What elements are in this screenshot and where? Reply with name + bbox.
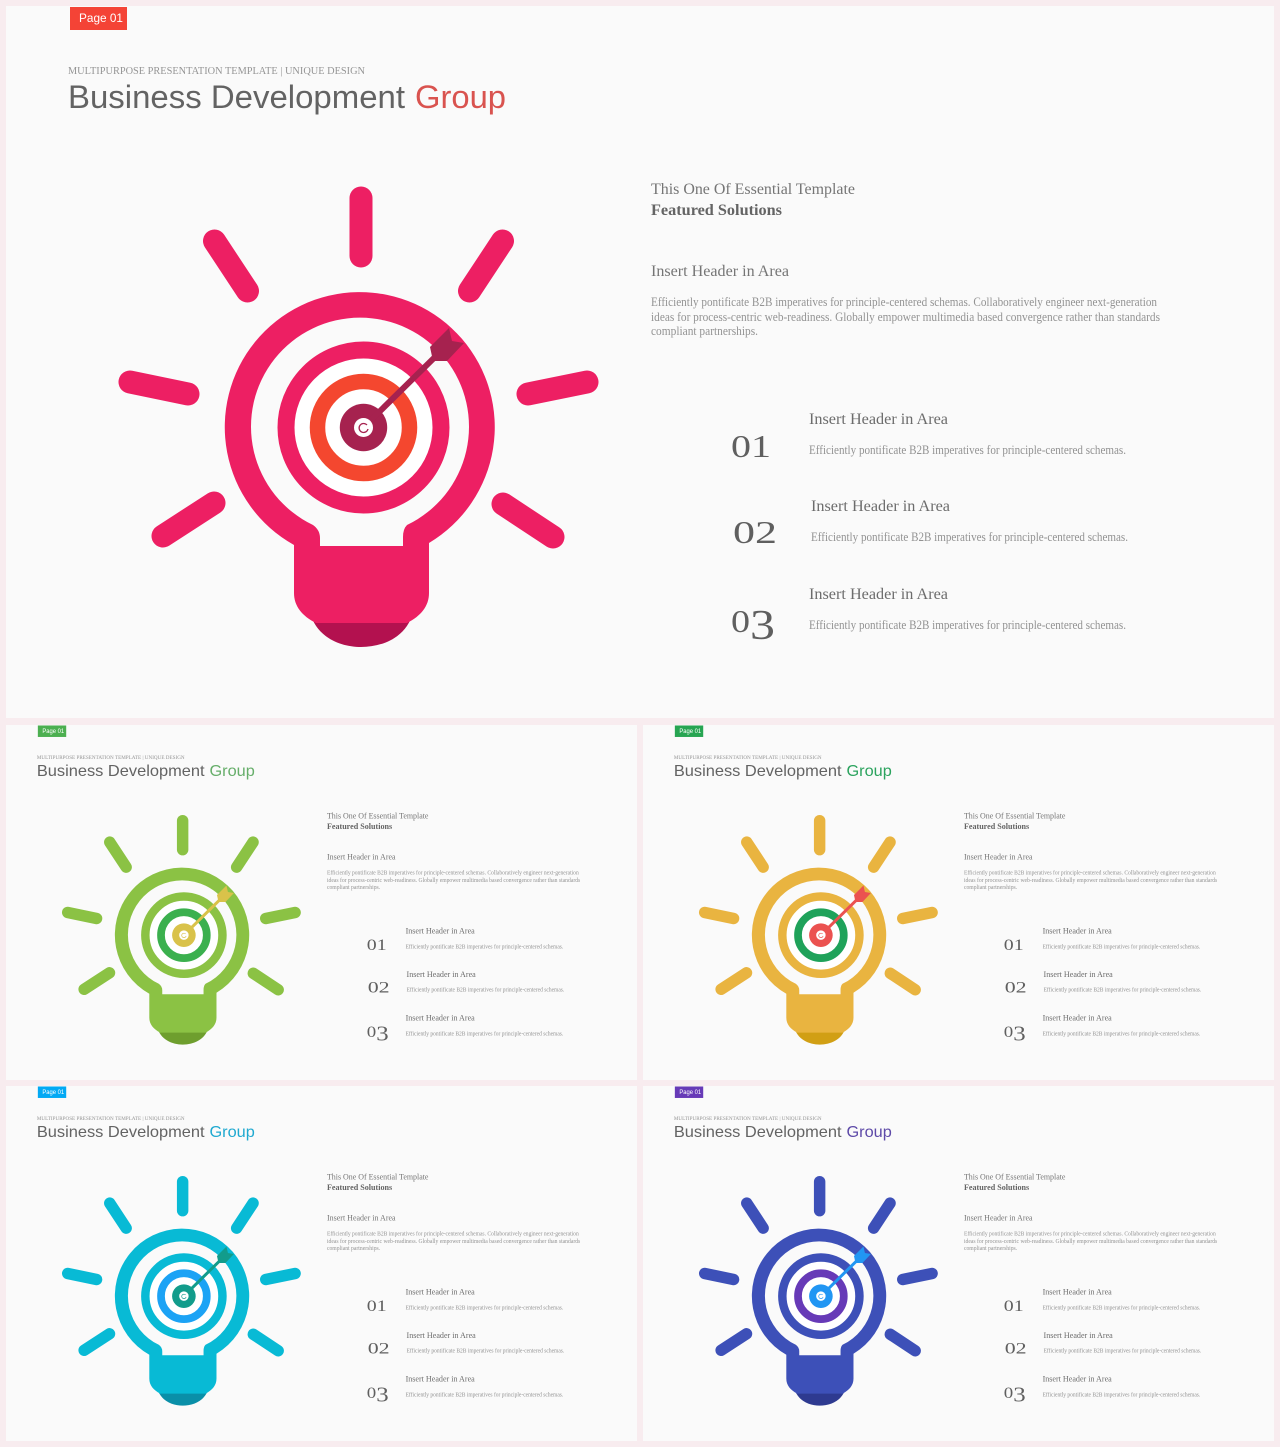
- text block: intro: This One Of Essential Template: [651, 181, 855, 198]
- text block: intro: Efficiently pontificate B2B imperatives for principle-centered schemas. Collaboratively engineer next-generation: [964, 870, 1217, 877]
- title: Business Development: [674, 1124, 842, 1141]
- page tag: [70, 7, 127, 30]
- list item 03: [367, 1375, 564, 1407]
- subtitle: MULTIPURPOSE PRESENTATION TEMPLATE | UNIQUE DESIGN: [68, 65, 365, 77]
- list item 03: Insert Header in Area: [809, 586, 948, 603]
- bulb body: [115, 1229, 249, 1394]
- text block: intro: Insert Header in Area: [964, 1214, 1033, 1223]
- dart: [372, 328, 464, 419]
- title: Group: [210, 1124, 255, 1141]
- icon: light bulb with target: [705, 821, 932, 1045]
- target rings: [782, 897, 859, 974]
- list item 03: Efficiently pontificate B2B imperatives for principle-centered schemas.: [1043, 1392, 1201, 1399]
- text block: intro: ideas for process-centric web-readiness. Globally empower multimedia based convergence rather than standards: [964, 1238, 1218, 1245]
- list item 02: Insert Header in Area: [407, 1331, 476, 1340]
- bulb cap: [157, 1027, 209, 1045]
- text block: intro: This One Of Essential Template: [327, 812, 429, 821]
- list item 03: 3: [376, 1022, 389, 1046]
- panel: red slide: [6, 6, 1274, 718]
- text block: intro: [964, 1173, 1218, 1252]
- list item 02: 02: [1005, 1341, 1027, 1358]
- list item 02: Insert Header in Area: [811, 498, 950, 515]
- text block: intro: Insert Header in Area: [327, 853, 396, 862]
- list item 01: 01: [731, 428, 771, 464]
- list item 01: Efficiently pontificate B2B imperatives for principle-centered schemas.: [1043, 943, 1201, 950]
- list item 01: [1004, 926, 1201, 954]
- list item 02: [368, 970, 565, 997]
- list item 01: 01: [1004, 937, 1024, 954]
- list item 01: Insert Header in Area: [406, 1287, 475, 1296]
- list item 01: Insert Header in Area: [809, 411, 948, 428]
- list item 01: [367, 926, 564, 954]
- list item 02: 02: [368, 980, 390, 997]
- list item 03: Insert Header in Area: [406, 1375, 475, 1384]
- list item 03: Efficiently pontificate B2B imperatives for principle-centered schemas.: [1043, 1031, 1201, 1038]
- icon: light bulb with target: [130, 198, 587, 647]
- title: Group: [415, 79, 506, 115]
- text block: intro: This One Of Essential Template: [964, 1173, 1066, 1182]
- text block: intro: compliant partnerships.: [651, 324, 758, 338]
- text block: intro: ideas for process-centric web-readiness. Globally empower multimedia based convergence rather than standards: [964, 877, 1218, 884]
- text block: intro: This One Of Essential Template: [327, 1173, 429, 1182]
- page tag: Page 01: [679, 1090, 702, 1096]
- icon: light bulb with target: [705, 1182, 932, 1406]
- text block: intro: Featured Solutions: [327, 1183, 392, 1192]
- target rings: [145, 897, 222, 974]
- text block: intro: Efficiently pontificate B2B imperatives for principle-centered schemas. Collaboratively engineer next-generation: [651, 295, 1158, 309]
- list item 01: Insert Header in Area: [1043, 926, 1112, 935]
- list item 03: 3: [1013, 1383, 1026, 1407]
- list item 02: Efficiently pontificate B2B imperatives for principle-centered schemas.: [811, 530, 1128, 544]
- bulb cap: [310, 612, 413, 647]
- dart: [825, 886, 871, 931]
- title: Business Development: [674, 763, 842, 780]
- list item 02: 02: [1005, 980, 1027, 997]
- title: Group: [847, 763, 892, 780]
- text block: intro: ideas for process-centric web-readiness. Globally empower multimedia based convergence rather than standards: [327, 1238, 581, 1245]
- panel: green slide: [6, 725, 637, 1080]
- page tag: [675, 1086, 703, 1098]
- bulb body: [752, 1229, 886, 1394]
- dart: [825, 1247, 871, 1292]
- list item 02: Efficiently pontificate B2B imperatives for principle-centered schemas.: [407, 1348, 565, 1355]
- page tag: Page 01: [42, 1090, 65, 1096]
- bulb body: [225, 292, 495, 623]
- list item 02: [1005, 970, 1202, 997]
- bulb body: [752, 868, 886, 1033]
- subtitle: MULTIPURPOSE PRESENTATION TEMPLATE | UNIQUE DESIGN: [37, 1116, 185, 1122]
- text block: intro: Efficiently pontificate B2B imperatives for principle-centered schemas. Collaboratively engineer next-generation: [964, 1231, 1217, 1238]
- list item 03: [367, 1014, 564, 1046]
- list item 02: Efficiently pontificate B2B imperatives for principle-centered schemas.: [1044, 987, 1202, 994]
- list item 01: Efficiently pontificate B2B imperatives for principle-centered schemas.: [406, 943, 564, 950]
- list item 03: 3: [750, 603, 775, 649]
- list item 03: 3: [1013, 1022, 1026, 1046]
- page tag: Page 01: [42, 729, 65, 735]
- list item 03: 0: [1004, 1385, 1012, 1402]
- icon: light bulb with target: [68, 821, 295, 1045]
- list item 02: Insert Header in Area: [407, 970, 476, 979]
- list item 02: Efficiently pontificate B2B imperatives for principle-centered schemas.: [407, 987, 565, 994]
- text block: intro: Insert Header in Area: [327, 1214, 396, 1223]
- text block: intro: Efficiently pontificate B2B imperatives for principle-centered schemas. Collaboratively engineer next-generation: [327, 1231, 580, 1238]
- text block: intro: Efficiently pontificate B2B imperatives for principle-centered schemas. Collaboratively engineer next-generation: [327, 870, 580, 877]
- text block: intro: [651, 181, 1160, 338]
- title: Business Development: [68, 79, 405, 115]
- list item 01: [731, 411, 1126, 464]
- bulb cap: [794, 1027, 846, 1045]
- title: Business Development: [37, 1124, 205, 1141]
- text block: intro: [327, 812, 581, 891]
- list item 03: Efficiently pontificate B2B imperatives for principle-centered schemas.: [406, 1392, 564, 1399]
- list item 01: Efficiently pontificate B2B imperatives for principle-centered schemas.: [809, 443, 1126, 457]
- list item 03: Efficiently pontificate B2B imperatives for principle-centered schemas.: [809, 618, 1126, 632]
- text block: intro: ideas for process-centric web-readiness. Globally empower multimedia based convergence rather than standards: [651, 310, 1160, 324]
- list item 01: Efficiently pontificate B2B imperatives for principle-centered schemas.: [1043, 1304, 1201, 1311]
- bulb rays: [705, 821, 932, 990]
- list item 03: 0: [731, 603, 747, 639]
- title: Business Development: [37, 763, 205, 780]
- text block: intro: [327, 1173, 581, 1252]
- dart: [188, 886, 234, 931]
- list item 02: [1005, 1331, 1202, 1358]
- page tag: [675, 725, 703, 737]
- list item 03: Insert Header in Area: [406, 1014, 475, 1023]
- text block: intro: Featured Solutions: [964, 822, 1029, 831]
- icon: light bulb with target: [68, 1182, 295, 1406]
- list item 02: [733, 498, 1128, 550]
- panel: blue slide: [643, 1086, 1274, 1441]
- list item 02: [368, 1331, 565, 1358]
- bulb body: [115, 868, 249, 1033]
- list item 02: Insert Header in Area: [1044, 970, 1113, 979]
- text block: intro: ideas for process-centric web-readiness. Globally empower multimedia based convergence rather than standards: [327, 877, 581, 884]
- text block: intro: Featured Solutions: [651, 202, 782, 219]
- list item 01: [1004, 1287, 1201, 1315]
- list item 03: 3: [376, 1383, 389, 1407]
- title: Group: [210, 763, 255, 780]
- list item 03: [1004, 1375, 1201, 1407]
- text block: intro: compliant partnerships.: [327, 1245, 381, 1252]
- list item 01: 01: [367, 937, 387, 954]
- list item 02: Efficiently pontificate B2B imperatives for principle-centered schemas.: [1044, 1348, 1202, 1355]
- list item 01: Insert Header in Area: [1043, 1287, 1112, 1296]
- list item 03: Efficiently pontificate B2B imperatives for principle-centered schemas.: [406, 1031, 564, 1038]
- page tag: Page 01: [79, 11, 123, 25]
- title: Group: [847, 1124, 892, 1141]
- list item 01: Insert Header in Area: [406, 926, 475, 935]
- list item 03: Insert Header in Area: [1043, 1375, 1112, 1384]
- dart: [188, 1247, 234, 1292]
- list item 03: [1004, 1014, 1201, 1046]
- target rings: [286, 350, 441, 505]
- panel: cyan slide: [6, 1086, 637, 1441]
- text block: intro: This One Of Essential Template: [964, 812, 1066, 821]
- bulb rays: [68, 821, 295, 990]
- subtitle: MULTIPURPOSE PRESENTATION TEMPLATE | UNIQUE DESIGN: [674, 755, 822, 761]
- text block: intro: Featured Solutions: [327, 822, 392, 831]
- text block: intro: [964, 812, 1218, 891]
- text block: intro: compliant partnerships.: [964, 1245, 1018, 1252]
- subtitle: MULTIPURPOSE PRESENTATION TEMPLATE | UNIQUE DESIGN: [674, 1116, 822, 1122]
- target rings: [145, 1258, 222, 1335]
- text block: intro: Insert Header in Area: [964, 853, 1033, 862]
- bulb rays: [68, 1182, 295, 1351]
- list item 03: Insert Header in Area: [1043, 1014, 1112, 1023]
- text block: intro: Featured Solutions: [964, 1183, 1029, 1192]
- list item 01: 01: [1004, 1298, 1024, 1315]
- list item 01: 01: [367, 1298, 387, 1315]
- subtitle: MULTIPURPOSE PRESENTATION TEMPLATE | UNIQUE DESIGN: [37, 755, 185, 761]
- bulb cap: [794, 1388, 846, 1406]
- page tag: Page 01: [679, 729, 702, 735]
- target rings: [782, 1258, 859, 1335]
- page tag: [38, 1086, 66, 1098]
- list item 02: 02: [368, 1341, 390, 1358]
- list item 02: 02: [733, 514, 777, 550]
- text block: intro: Insert Header in Area: [651, 263, 789, 280]
- list item 03: 0: [367, 1024, 375, 1041]
- page tag: [38, 725, 66, 737]
- list item 02: Insert Header in Area: [1044, 1331, 1113, 1340]
- bulb rays: [130, 198, 587, 537]
- bulb cap: [157, 1388, 209, 1406]
- list item 03: 0: [1004, 1024, 1012, 1041]
- list item 03: [731, 586, 1126, 649]
- list item 01: Efficiently pontificate B2B imperatives for principle-centered schemas.: [406, 1304, 564, 1311]
- bulb rays: [705, 1182, 932, 1351]
- list item 03: 0: [367, 1385, 375, 1402]
- text block: intro: compliant partnerships.: [964, 884, 1018, 891]
- list item 01: [367, 1287, 564, 1315]
- text block: intro: compliant partnerships.: [327, 884, 381, 891]
- panel: yellow slide: [643, 725, 1274, 1080]
